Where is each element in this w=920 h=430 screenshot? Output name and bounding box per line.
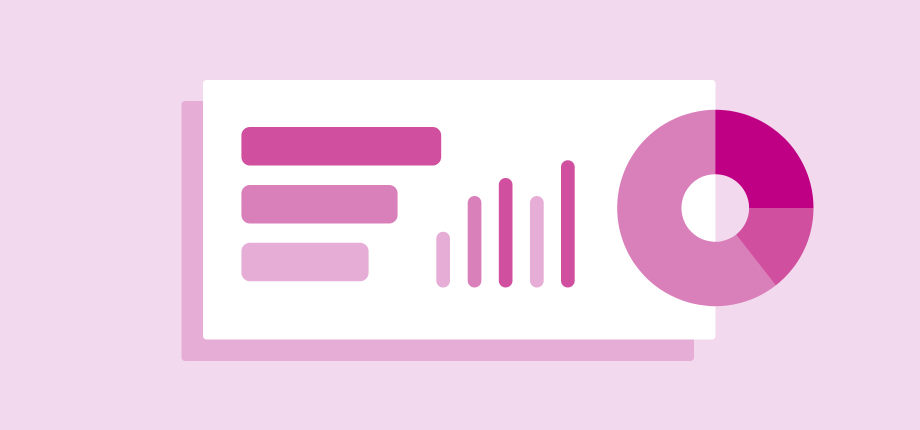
vertical bar 4 [530, 196, 544, 288]
donut segment: magenta quarter [715, 110, 814, 208]
horizontal bars [241, 127, 441, 281]
vertical bar 1 [436, 232, 450, 288]
white card panel [203, 80, 716, 340]
horizontal bar: dark [241, 127, 441, 166]
horizontal bar: light [241, 243, 369, 281]
vertical bar 3 [499, 178, 512, 288]
donut segment: large medium pink [617, 110, 776, 306]
vertical bar 2 [468, 196, 481, 288]
vertical bar chart [436, 160, 575, 288]
card shadow panel [182, 101, 694, 361]
donut segment: dark pink [736, 208, 814, 285]
horizontal bar: medium [241, 185, 398, 224]
donut chart [617, 110, 814, 306]
vertical bar 5 [561, 160, 575, 288]
